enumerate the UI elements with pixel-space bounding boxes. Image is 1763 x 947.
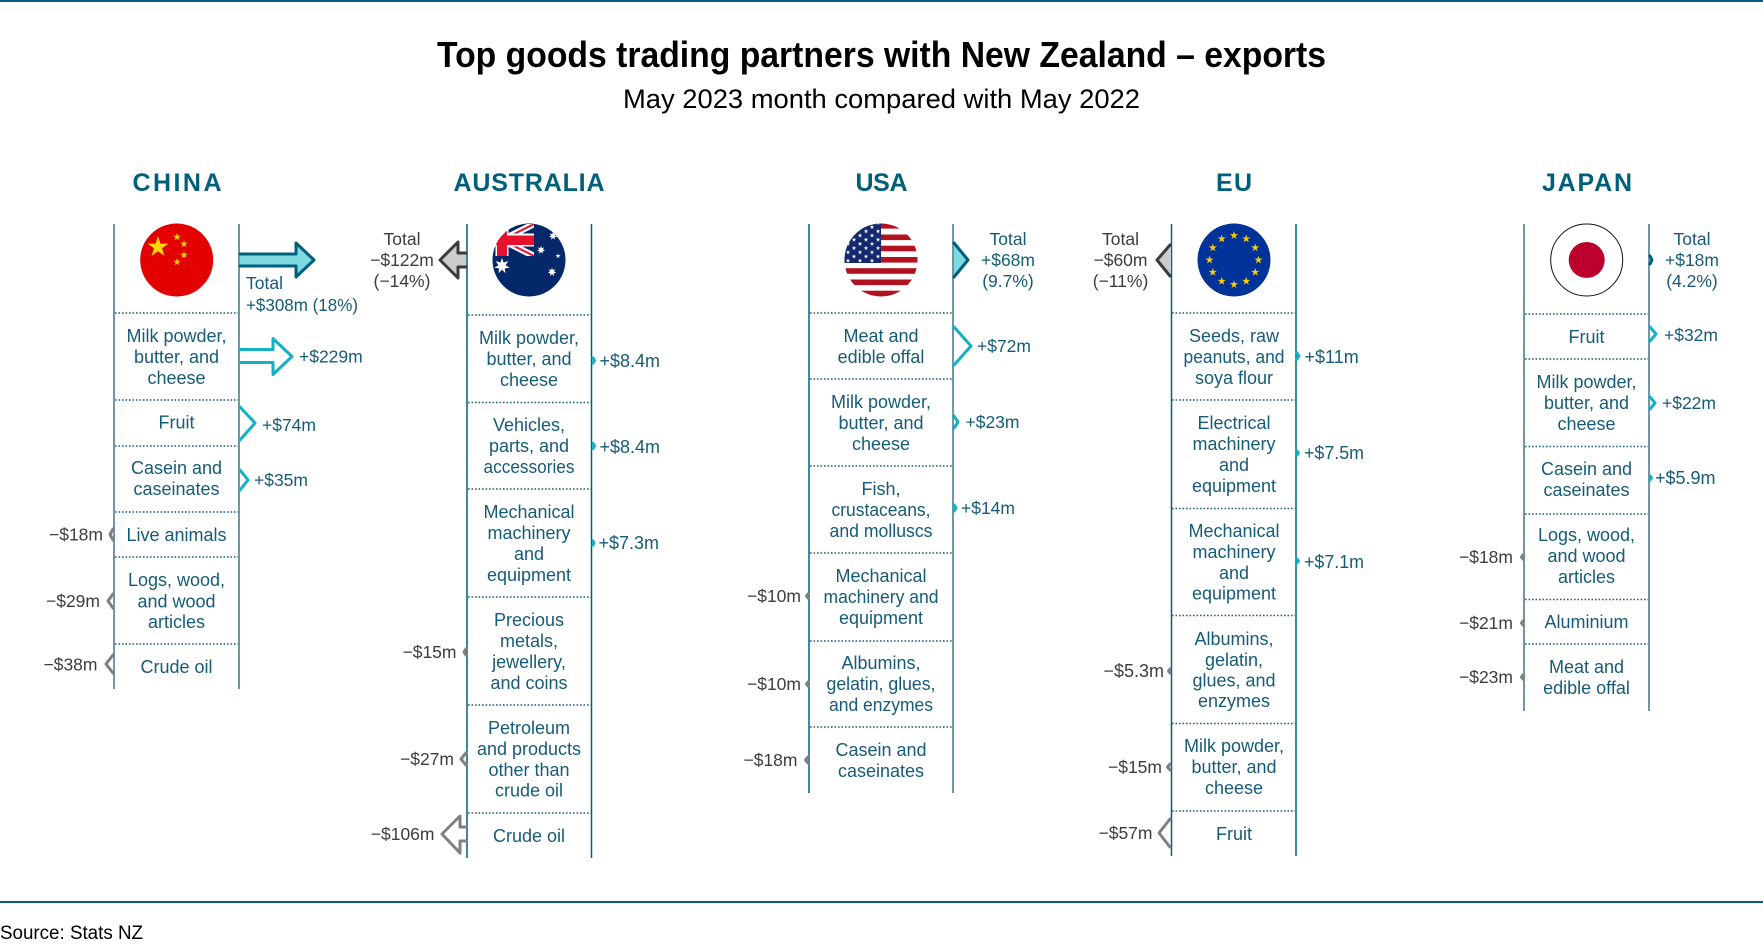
heading: EU: EU [1216, 169, 1252, 197]
row: Electrical machinery and equipment [1192, 413, 1364, 496]
icon: Australia flag [490, 224, 566, 296]
row: Fruit [1098, 819, 1252, 847]
total: EU [1093, 229, 1170, 291]
row: Seeds, raw peanuts, and soya flour [1184, 326, 1359, 388]
row: Milk powder, butter, and cheese: +$229m [299, 346, 363, 366]
row: Seeds, raw peanuts, and soya flour: soya flour [1195, 368, 1273, 388]
row: Meat and edible offal [838, 326, 1031, 367]
source: Source: Stats NZ [0, 923, 143, 944]
row: Petroleum and products other than crude oil: −$27m [400, 749, 454, 769]
row: Logs, wood, and wood articles: and wood [137, 592, 216, 612]
row: Fish, crustaceans, and molluscs: Fish, [861, 479, 901, 499]
row: Electrical machinery and equipment: and [1219, 455, 1249, 475]
row: Milk powder, butter, and cheese: +$22m [1662, 393, 1716, 413]
row: Petroleum and products other than crude oil: Petroleum [488, 718, 570, 738]
row: Mechanical machinery and equipment: and [1219, 563, 1249, 583]
row: Logs, wood, and wood articles: and wood [1547, 546, 1626, 566]
row: Mechanical machinery and equipment [747, 566, 938, 628]
row: Albumins, gelatin, glues, and enzymes: Albumins, [1194, 629, 1274, 649]
row: Albumins, gelatin, glues, and enzymes: enzymes [1198, 691, 1270, 711]
total: Australia [370, 229, 466, 291]
row: Mechanical machinery and equipment: +$7.1m [1304, 552, 1364, 572]
row: Live animals: −$18m [49, 524, 103, 544]
row: Precious metals, jewellery, and coins: jewellery, [491, 652, 566, 672]
row: Vehicles, parts, and accessories: +$8.4m [600, 437, 660, 457]
panel: China [44, 169, 363, 689]
total: USA: Total [990, 229, 1026, 249]
row: Milk powder, butter, and cheese: butter, and [134, 347, 219, 367]
row: Casein and caseinates [1541, 459, 1716, 500]
row: Aluminium: Aluminium [1544, 612, 1629, 632]
row: Mechanical machinery and equipment: equipment [839, 608, 923, 628]
row: Milk powder, butter, and cheese: Milk powder, [479, 328, 579, 348]
title: Top goods trading partners with New Zealand – exports [437, 34, 1326, 75]
row: Electrical machinery and equipment: +$7.5m [1304, 443, 1364, 463]
row: Crude oil: −$106m [371, 824, 434, 844]
row: Logs, wood, and wood articles: articles [1558, 567, 1615, 587]
total: Japan: (4.2%) [1666, 271, 1718, 291]
row: Seeds, raw peanuts, and soya flour: +$11m [1304, 347, 1359, 367]
row: Casein and caseinates: +$35m [254, 470, 308, 490]
row: Fish, crustaceans, and molluscs: crustaceans, [832, 500, 930, 520]
row: Casein and caseinates: +$5.9m [1655, 468, 1716, 488]
row: Milk powder, butter, and cheese: Milk powder, [1536, 372, 1637, 392]
row: Fruit: Fruit [1568, 327, 1604, 347]
total: Japan: +$18m [1665, 250, 1719, 270]
row: Casein and caseinates [131, 458, 308, 499]
row: Fruit [1568, 325, 1718, 347]
row: Milk powder, butter, and cheese [1536, 372, 1716, 434]
row: Albumins, gelatin, glues, and enzymes [747, 653, 936, 715]
row: Milk powder, butter, and cheese: Milk powder, [1184, 736, 1284, 756]
row: Fruit [158, 407, 316, 440]
row: Meat and edible offal: Meat and [1549, 657, 1624, 677]
row: Petroleum and products other than crude oil [400, 718, 581, 800]
row: Crude oil [371, 816, 565, 853]
row: Milk powder, butter, and cheese: −$15m [1108, 757, 1162, 777]
row: Mechanical machinery and equipment: +$7.3m [598, 533, 659, 553]
heading: Japan: JAPAN [1542, 169, 1632, 197]
row: Milk powder, butter, and cheese: Milk powder, [831, 392, 931, 412]
row: Fish, crustaceans, and molluscs [830, 479, 1015, 541]
row: Mechanical machinery and equipment: machinery [1192, 542, 1276, 562]
row: Logs, wood, and wood articles: articles [148, 612, 205, 632]
row: Precious metals, jewellery, and coins [402, 610, 568, 693]
row: Crude oil [44, 654, 213, 677]
row: Precious metals, jewellery, and coins: −$15m [402, 642, 456, 662]
row: Logs, wood, and wood articles [1459, 525, 1635, 587]
row: Logs, wood, and wood articles: Logs, wood, [128, 570, 225, 590]
total: USA: +$68m [981, 250, 1035, 270]
row: Mechanical machinery and equipment: machinery [487, 523, 571, 543]
row: Meat and edible offal: −$23m [1459, 667, 1513, 687]
row: Casein and caseinates: caseinates [838, 761, 924, 781]
row: Casein and caseinates: Casein and [131, 458, 222, 478]
row: Logs, wood, and wood articles: −$18m [1459, 547, 1513, 567]
row: Fruit: Fruit [1216, 824, 1252, 844]
row: Logs, wood, and wood articles: −$29m [46, 591, 100, 611]
row: Albumins, gelatin, glues, and enzymes: gelatin, glues, [826, 674, 936, 694]
row: Mechanical machinery and equipment: equipment [487, 565, 571, 585]
row: Milk powder, butter, and cheese: +$23m [966, 412, 1020, 432]
row: Meat and edible offal: edible offal [838, 347, 924, 367]
row: Mechanical machinery and equipment: machinery and [824, 587, 938, 607]
panel: Australia [370, 169, 660, 858]
row: Casein and caseinates [744, 740, 927, 781]
total: Japan [1650, 229, 1719, 291]
row: Meat and edible offal: edible offal [1543, 678, 1630, 698]
total: China: Total [246, 273, 283, 293]
row: Milk powder, butter, and cheese: cheese [1205, 778, 1263, 798]
row: Crude oil: Crude oil [140, 657, 213, 677]
row: Crude oil: Crude oil [493, 826, 565, 846]
row: Fruit: +$32m [1664, 325, 1718, 345]
row: Milk powder, butter, and cheese: cheese [1557, 414, 1616, 434]
row: Milk powder, butter, and cheese: butter, and [1191, 757, 1277, 777]
row: Petroleum and products other than crude oil: other than [488, 760, 570, 780]
total: USA: (9.7%) [982, 271, 1034, 291]
total: USA [954, 229, 1035, 291]
row: Crude oil: −$38m [44, 654, 98, 674]
row: Albumins, gelatin, glues, and enzymes [1103, 629, 1276, 711]
row: Live animals: Live animals [126, 525, 227, 545]
row: Aluminium [1459, 612, 1629, 633]
row: Milk powder, butter, and cheese [126, 326, 363, 388]
row: Logs, wood, and wood articles: Logs, wood, [1538, 525, 1635, 545]
row: Milk powder, butter, and cheese [831, 392, 1020, 454]
row: Mechanical machinery and equipment: equipment [1192, 584, 1276, 604]
row: Mechanical machinery and equipment [1188, 521, 1364, 604]
row: Casein and caseinates: −$18m [744, 750, 798, 770]
icon: China flag [140, 224, 213, 296]
row: Aluminium: −$21m [1459, 613, 1513, 633]
row: Electrical machinery and equipment: Electrical [1197, 413, 1271, 433]
total: EU: Total [1102, 229, 1139, 249]
total: Australia: (−14%) [374, 271, 430, 291]
row: Milk powder, butter, and cheese: butter, and [486, 349, 572, 369]
panel: EU [1093, 169, 1364, 856]
row: Mechanical machinery and equipment: Mechanical [835, 566, 927, 586]
row: Logs, wood, and wood articles [46, 570, 225, 632]
row: Vehicles, parts, and accessories: parts, and [489, 436, 569, 456]
row: Seeds, raw peanuts, and soya flour: Seeds, raw [1189, 326, 1280, 346]
row: Meat and edible offal: +$72m [977, 336, 1031, 356]
row: Mechanical machinery and equipment: −$10m [747, 586, 801, 606]
heading: Australia: AUSTRALIA [454, 169, 604, 197]
row: Precious metals, jewellery, and coins: metals, [500, 631, 558, 651]
row: Milk powder, butter, and cheese: Milk powder, [126, 326, 227, 346]
icon: Japan flag [1551, 224, 1623, 296]
row: Mechanical machinery and equipment [483, 502, 659, 585]
row: Vehicles, parts, and accessories: accessories [484, 457, 574, 477]
row: Meat and edible offal: Meat and [843, 326, 919, 346]
row: Milk powder, butter, and cheese: cheese [852, 434, 910, 454]
row: Fish, crustaceans, and molluscs: and molluscs [830, 521, 932, 541]
total: Australia: −$122m [370, 250, 434, 270]
total: EU: −$60m [1094, 250, 1148, 270]
row: Vehicles, parts, and accessories: Vehicles, [493, 415, 565, 435]
row: Milk powder, butter, and cheese [1108, 736, 1284, 798]
row: Mechanical machinery and equipment: Mechanical [1188, 521, 1280, 541]
row: Vehicles, parts, and accessories [484, 415, 660, 477]
total: EU: (−11%) [1093, 271, 1148, 291]
panel: Japan [1459, 169, 1719, 711]
icon: USA flag [844, 223, 918, 297]
row: Casein and caseinates: Casein and [835, 740, 927, 760]
row: Electrical machinery and equipment: equipment [1192, 476, 1276, 496]
row: Milk powder, butter, and cheese: butter, and [838, 413, 924, 433]
row: Albumins, gelatin, glues, and enzymes: −$5.3m [1103, 661, 1164, 681]
row: Milk powder, butter, and cheese: cheese [147, 368, 206, 388]
row: Casein and caseinates: caseinates [1543, 480, 1630, 500]
row: Electrical machinery and equipment: machinery [1192, 434, 1276, 454]
heading: China: CHINA [132, 169, 222, 197]
panel: USA [744, 169, 1035, 793]
row: Petroleum and products other than crude oil: crude oil [495, 780, 563, 800]
row: Mechanical machinery and equipment: and [514, 544, 544, 564]
row: Albumins, gelatin, glues, and enzymes: gelatin, [1205, 650, 1263, 670]
row: Milk powder, butter, and cheese: butter, and [1544, 393, 1629, 413]
row: Precious metals, jewellery, and coins: and coins [490, 673, 568, 693]
row: Albumins, gelatin, glues, and enzymes: Albumins, [841, 653, 921, 673]
total: Japan: Total [1674, 229, 1710, 249]
row: Milk powder, butter, and cheese: +$8.4m [600, 351, 660, 371]
heading: USA: USA [856, 169, 908, 197]
row: Mechanical machinery and equipment: Mechanical [483, 502, 575, 522]
row: Albumins, gelatin, glues, and enzymes: −$10m [747, 674, 801, 694]
icon: EU flag [1198, 224, 1270, 296]
row: Fruit: Fruit [158, 412, 194, 432]
row: Live animals [49, 524, 227, 545]
row: Petroleum and products other than crude oil: and products [477, 739, 581, 759]
row: Albumins, gelatin, glues, and enzymes: and enzymes [829, 695, 933, 715]
row: Casein and caseinates: caseinates [133, 479, 220, 499]
row: Precious metals, jewellery, and coins: Precious [494, 610, 564, 630]
row: Milk powder, butter, and cheese: cheese [500, 370, 558, 390]
total: China: +$308m (18%) [246, 295, 358, 315]
row: Fruit: −$57m [1098, 823, 1152, 843]
row: Milk powder, butter, and cheese [479, 328, 660, 390]
row: Meat and edible offal [1459, 657, 1630, 698]
row: Fruit: +$74m [262, 415, 316, 435]
row: Seeds, raw peanuts, and soya flour: peanuts, and [1184, 347, 1284, 367]
row: Casein and caseinates: Casein and [1541, 459, 1632, 479]
total: Australia: Total [384, 229, 420, 249]
total: China [240, 243, 358, 315]
row: Albumins, gelatin, glues, and enzymes: glues, and [1192, 670, 1276, 690]
subtitle: May 2023 month compared with May 2022 [623, 84, 1140, 114]
row: Fish, crustaceans, and molluscs: +$14m [961, 498, 1015, 518]
